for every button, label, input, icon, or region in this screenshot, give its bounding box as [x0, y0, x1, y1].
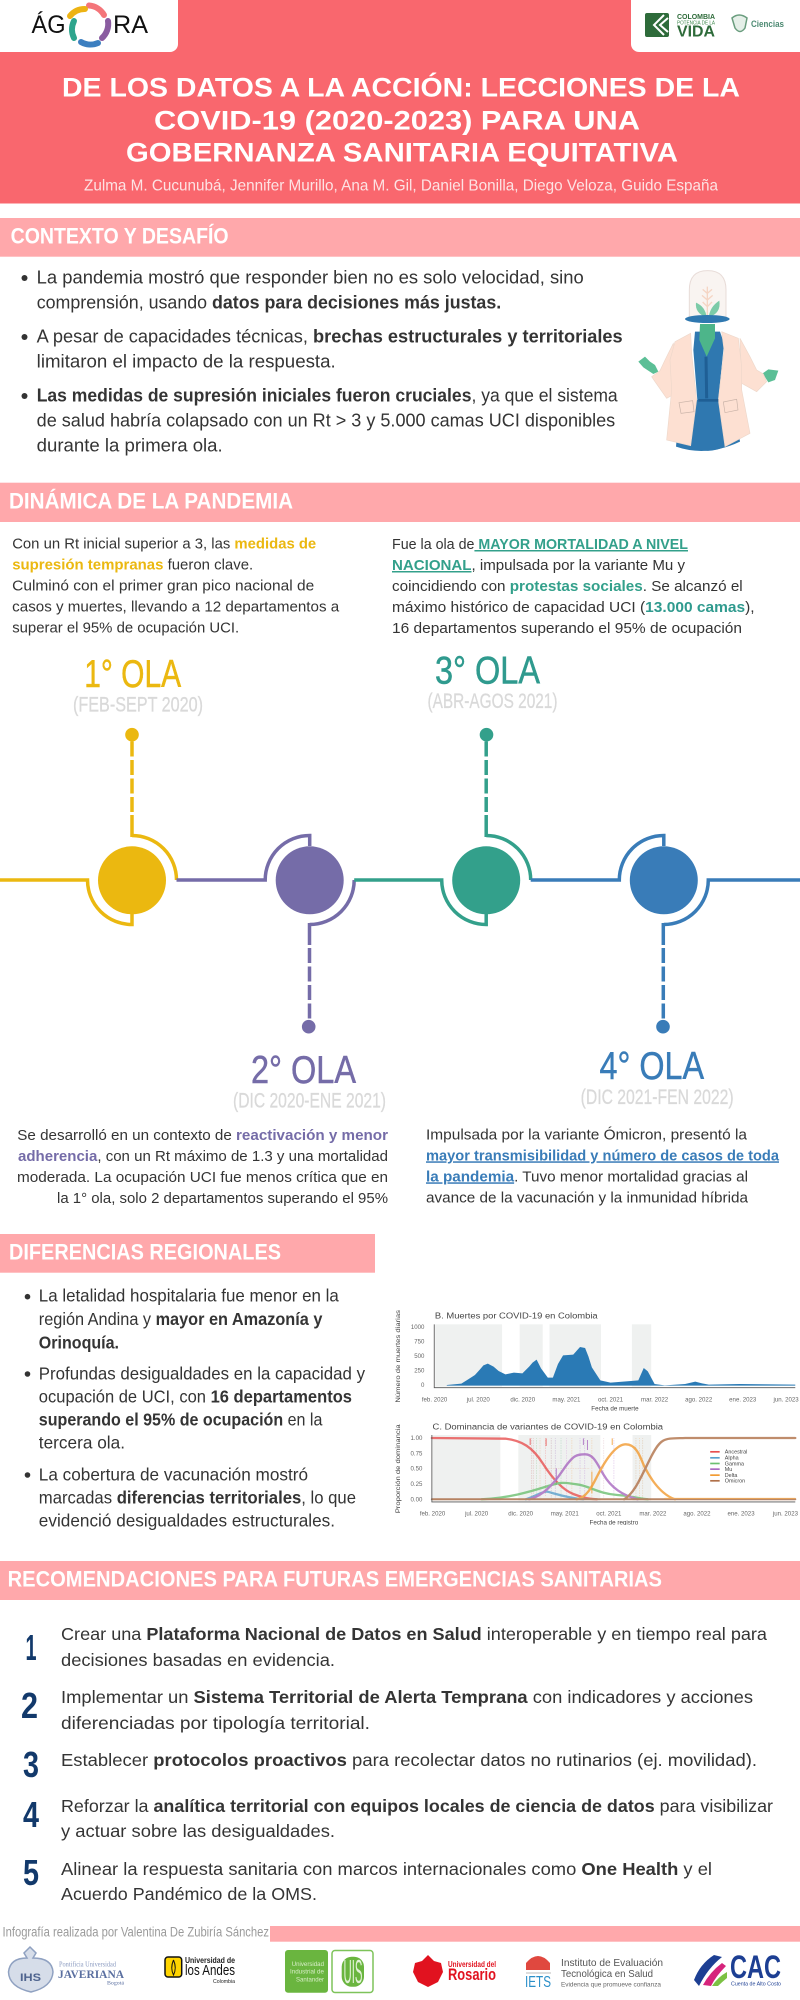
text block: primera ola: casos y muertes, llevando a 12 departamentos a — [12, 598, 340, 615]
logo: Universidad del Rosario — [413, 1955, 496, 1987]
heading: recomendaciones: RECOMENDACIONES PARA FUTURAS EMERGENCIAS SANITARIAS — [8, 1567, 662, 1592]
chart B: muertes diarias: 250 — [414, 1368, 425, 1374]
panel: recomendaciones — [0, 1561, 800, 1904]
chart C: dominancia de variantes: 0.75 — [410, 1451, 423, 1457]
panel: dinámica de la pandemia — [0, 483, 800, 1207]
chart C: dominancia de variantes: 1.00 — [410, 1436, 423, 1442]
chart C: dominancia de variantes: ene. 2023 — [727, 1512, 755, 1518]
logo: Universidad de los Andes: los Andes — [185, 1963, 235, 1979]
heading: contexto y desafío — [0, 218, 800, 257]
chart B: muertes diarias: Fecha de muerte — [591, 1406, 639, 1413]
text block: vacunación: evidenció desigualdades estructurales. — [39, 1510, 335, 1530]
text block: tercera ola: coincidiendo con protestas sociales. Se alcanzó el — [392, 578, 743, 595]
recommendation 2: 2 — [21, 1685, 38, 1726]
text block: tercera ola — [392, 536, 755, 637]
panel: contexto y desafío — [0, 218, 800, 455]
wave 2 node — [176, 836, 354, 1034]
logo: UIS: UIS — [344, 1953, 362, 1990]
text block: segunda ola: la 1° ola, solo 2 departamentos superando el 95% — [57, 1190, 388, 1207]
logo: Cuenta de Alto Costo: CAC — [730, 1949, 781, 1985]
logo: Javeriana: JAVERIANA — [58, 1967, 124, 1981]
label: 3° ola — [428, 649, 558, 713]
text block: desigualdades: tercera ola. — [39, 1433, 125, 1453]
chart B: muertes diarias: Número de muertes diarias — [395, 1309, 402, 1403]
text block: tercera ola: máximo histórico de capacidad UCI ( 13.000 camas), — [392, 599, 755, 616]
chart C: dominancia de variantes: C. Dominancia de variantes de COVID-19 en Colombia — [433, 1421, 663, 1431]
label: 1° ola: 1° OLA — [84, 653, 181, 696]
recommendation 1: Crear una Plataforma Nacional de Datos en Salud interoperable y en tiempo real para — [61, 1624, 767, 1644]
logo: Ágora: ÁG — [32, 10, 66, 39]
chart B: muertes diarias: 0 — [421, 1383, 425, 1389]
chart C: dominancia de variantes: oct. 2021 — [596, 1512, 622, 1518]
heading: dinámica de la pandemia — [0, 483, 800, 522]
logos: Colombia potencia de la vida, Ciencias — [631, 0, 800, 52]
text block: bullet 3 — [22, 385, 619, 455]
text block: primera ola: Culminó con el primer gran pico nacional de — [12, 577, 314, 594]
panel: diferencias regionales — [0, 1234, 799, 1530]
text block: segunda ola: moderada. La ocupación UCI fue menos crítica que en — [17, 1169, 388, 1186]
text block: cuarta ola: Impulsada por la variante Ómicron, presentó la — [426, 1126, 748, 1143]
logo: UIS — [285, 1950, 373, 1993]
label: 2° ola: 2° OLA — [251, 1049, 356, 1092]
chart C: dominancia de variantes: ago. 2022 — [683, 1512, 711, 1518]
text block: letalidad: La letalidad hospitalaria fue menor en la — [39, 1286, 339, 1306]
title: COVID-19 (2020-2023) PARA UNA — [154, 105, 640, 135]
text block: letalidad: Orinoquía. — [39, 1332, 119, 1352]
logo: IETS: IETS — [525, 1974, 551, 1991]
chart C: dominancia de variantes: Proporción de dominancia — [395, 1424, 402, 1513]
recommendation 5: Acuerdo Pandémico de la OMS. — [61, 1884, 317, 1904]
recommendation 4: 4 — [23, 1794, 39, 1835]
text block: bullet 2: limitaron el impacto de la respuesta. — [37, 351, 336, 371]
chart B: muertes diarias: 500 — [414, 1354, 425, 1360]
logo: UIS: Industrial de — [290, 1968, 324, 1976]
title: GOBERNANZA SANITARIA EQUITATIVA — [126, 138, 678, 168]
heading: diferencias regionales: DIFERENCIAS REGIONALES — [9, 1239, 281, 1264]
text block: vacunación: La cobertura de vacunación mostró — [39, 1464, 308, 1484]
chart C: dominancia de variantes: 0.50 — [410, 1467, 423, 1473]
text block: bullet 3: durante la primera ola. — [37, 435, 223, 455]
text block: cuarta ola: la pandemia. Tuvo menor mortalidad gracias al — [426, 1168, 748, 1185]
recommendation 3 — [23, 1744, 757, 1785]
chart legend: Ancestral — [725, 1450, 747, 1456]
text block: vacunación: marcadas diferencias territoriales, lo que — [39, 1487, 356, 1507]
text block: bullet 1: comprensión, usando datos para decisiones más justas. — [37, 292, 501, 312]
recommendation 1: decisiones basadas en evidencia. — [61, 1650, 335, 1670]
chart legend: Alpha — [725, 1456, 739, 1462]
text block: primera ola — [12, 535, 340, 636]
label: 3° ola: (ABR-AGOS 2021) — [428, 689, 558, 713]
logo: IETS: Instituto de Evaluación — [561, 1957, 663, 1969]
logos: Colombia potencia de la vida, Ciencias: Ciencias — [751, 19, 784, 30]
text block: desigualdades: ocupación de UCI, con 16 departamentos — [39, 1387, 352, 1407]
recommendation 4: Reforzar la analítica territorial con equipos locales de ciencia de datos para visibilizar — [61, 1796, 773, 1816]
text block: letalidad: región Andina y mayor en Amazonía y — [39, 1309, 323, 1329]
chart B: muertes diarias: feb. 2020 — [422, 1397, 448, 1403]
chart legend: Omicron — [725, 1479, 745, 1485]
recommendation 3: 3 — [23, 1744, 39, 1785]
label: 3° ola: 3° OLA — [435, 649, 540, 692]
chart legend — [710, 1450, 747, 1485]
footer credit — [2, 1925, 800, 1942]
logo: Javeriana — [8, 1947, 125, 1992]
recommendation 5 — [23, 1852, 712, 1904]
chart C: dominancia de variantes: jul. 2020 — [464, 1512, 489, 1518]
title — [62, 72, 740, 168]
text block: cuarta ola — [426, 1126, 780, 1206]
heading: contexto y desafío: CONTEXTO Y DESAFÍO — [11, 223, 229, 248]
heading: diferencias regionales — [0, 1234, 375, 1273]
logo: Universidad de los Andes — [165, 1956, 236, 1985]
footer credit: Infografía realizada por Valentina De Zubiría Sánchez — [2, 1925, 269, 1940]
recommendation 5: Alinear la respuesta sanitaria con marcos internacionales como One Health y el — [61, 1859, 712, 1879]
chart legend: Delta — [725, 1473, 737, 1479]
logo: Universidad del Rosario: Universidad del — [448, 1960, 496, 1969]
chart C: dominancia de variantes: jun. 2023 — [772, 1512, 799, 1518]
chart B: muertes diarias — [395, 1309, 799, 1413]
chart C: dominancia de variantes: may. 2021 — [551, 1512, 579, 1518]
recommendation 1 — [26, 1624, 767, 1670]
label: 1° ola — [73, 653, 203, 717]
text block: desigualdades — [25, 1363, 365, 1453]
recommendation 5: 5 — [23, 1852, 39, 1893]
logo: UIS: Universidad — [292, 1961, 324, 1968]
logo: Ágora: RA — [113, 11, 148, 39]
logo: Javeriana: Pontificia Universidad — [59, 1960, 116, 1969]
text block: tercera ola: Fue la ola de MAYOR MORTALIDAD A NIVEL — [392, 536, 688, 553]
header banner — [0, 0, 800, 204]
chart B: muertes diarias: may. 2021 — [552, 1397, 581, 1403]
chart B: muertes diarias: B. Muertes por COVID-19 en Colombia — [435, 1310, 598, 1320]
chart C: dominancia de variantes — [395, 1421, 799, 1527]
text block: cuarta ola: avance de la vacunación y la inmunidad híbrida — [426, 1189, 749, 1206]
chart B: muertes diarias: 750 — [414, 1340, 425, 1346]
recommendation 1: 1 — [26, 1627, 36, 1668]
text block: segunda ola — [17, 1127, 388, 1207]
chart C: dominancia de variantes: feb. 2020 — [420, 1512, 446, 1518]
chart legend: Gamma — [725, 1461, 744, 1467]
chart B: muertes diarias: mar. 2022 — [641, 1397, 669, 1403]
chart legend: Mu — [725, 1467, 732, 1473]
chart C: dominancia de variantes: dic. 2020 — [508, 1512, 534, 1518]
label: 2° ola — [233, 1049, 386, 1113]
chart B: muertes diarias: jun. 2023 — [773, 1397, 799, 1403]
logo: IETS: Evidencia que promueve confianza — [561, 1982, 661, 1988]
logo: IETS — [525, 1956, 663, 1991]
logo: Javeriana: Bogotá — [107, 1982, 125, 1986]
authors: Zulma M. Cucunubá, Jennifer Murillo, Ana M. Gil, Daniel Bonilla, Diego Veloza, Guido España — [84, 178, 718, 195]
text block: bullet 2: A pesar de capacidades técnicas, brechas estructurales y territoriales — [37, 326, 623, 346]
logo: Javeriana: IHS — [20, 1972, 41, 1984]
logo: Universidad de los Andes: Universidad de — [185, 1956, 235, 1965]
chart B: muertes diarias: dic. 2020 — [510, 1397, 536, 1403]
label: 4° ola: 4° OLA — [600, 1045, 704, 1088]
logos: Colombia potencia de la vida, Ciencias: COLOMBIA — [677, 12, 716, 21]
label: 4° ola: (DIC 2021-FEN 2022) — [581, 1085, 734, 1109]
text block: cuarta ola: mayor transmisibilidad y número de casos de toda — [426, 1147, 780, 1164]
text block: segunda ola: adherencia, con un Rt máximo de 1.3 y una mortalidad — [18, 1148, 388, 1165]
label: 1° ola: (FEB-SEPT 2020) — [73, 693, 203, 717]
wave 3 node — [354, 728, 531, 924]
text block: bullet 1: La pandemia mostró que responder bien no es solo velocidad, sino — [37, 267, 584, 287]
text block: primera ola: superar el 95% de ocupación UCI. — [12, 619, 239, 636]
text block: bullet 1 — [22, 267, 584, 312]
chart B: muertes diarias: jul. 2020 — [466, 1397, 490, 1403]
timeline of four waves — [0, 728, 800, 1034]
chart C: dominancia de variantes: 0.00 — [410, 1497, 423, 1503]
heading: dinámica de la pandemia: DINÁMICA DE LA PANDEMIA — [9, 488, 293, 513]
chart B: muertes diarias: ene. 2023 — [729, 1397, 757, 1403]
heading: recomendaciones — [0, 1561, 800, 1600]
text block: bullet 3: de salud habría colapsado con un Rt > 3 y 5.000 camas UCI disponibles — [37, 410, 615, 430]
recommendation 4 — [23, 1794, 773, 1841]
recommendation 2 — [21, 1685, 753, 1733]
label: 4° ola — [581, 1045, 734, 1109]
chart C: dominancia de variantes: 0.25 — [410, 1482, 423, 1488]
wave 4 node — [531, 836, 800, 1034]
chart B: muertes diarias: 1000 — [411, 1325, 425, 1331]
recommendation 2: Implementar un Sistema Territorial de Alerta Temprana con indicadores y acciones — [61, 1687, 753, 1707]
logo: UIS: Santander — [296, 1977, 325, 1984]
text block: bullet 2 — [22, 326, 623, 371]
text block: tercera ola: NACIONAL, impulsada por la variante Mu y — [392, 557, 685, 574]
text block: desigualdades: superando el 95% de ocupación en la — [39, 1410, 323, 1430]
text block: letalidad — [25, 1286, 339, 1352]
text block: primera ola: Con un Rt inicial superior a 3, las medidas de — [12, 535, 316, 552]
text block: tercera ola: 16 departamentos superando el 95% de ocupación — [392, 620, 742, 637]
logo: Cuenta de Alto Costo: Cuenta de Alto Costo — [731, 1982, 781, 1988]
logo: Universidad del Rosario: Rosario — [448, 1965, 496, 1984]
title: DE LOS DATOS A LA ACCIÓN: LECCIONES DE LA — [62, 72, 740, 103]
recommendation 4: y actuar sobre las desigualdades. — [61, 1821, 335, 1841]
logo: Ágora — [0, 0, 178, 52]
label: 2° ola: (DIC 2020-ENE 2021) — [233, 1089, 386, 1113]
text block: bullet 3: Las medidas de supresión iniciales fueron cruciales, ya que el sistema — [37, 385, 619, 405]
chart B: muertes diarias: oct. 2021 — [598, 1397, 624, 1403]
chart: muertes por COVID-19 y dominancia de variantes — [395, 1309, 799, 1527]
logos: Colombia potencia de la vida, Ciencias: POTENCIA DE LA — [677, 20, 716, 26]
logos: Colombia potencia de la vida, Ciencias: VIDA — [677, 24, 715, 40]
icon: figure with glass dome head — [638, 271, 778, 451]
chart C: dominancia de variantes: Fecha de registro — [590, 1520, 639, 1527]
text block: primera ola: supresión tempranas fueron clave. — [12, 556, 253, 573]
logo: Universidad de los Andes: Colombia — [213, 1979, 236, 1985]
text block: desigualdades: Profundas desigualdades en la capacidad y — [39, 1363, 365, 1383]
chart B: muertes diarias: ago. 2022 — [685, 1397, 713, 1403]
logo: IETS: Tecnológica en Salud — [561, 1968, 653, 1980]
chart C: dominancia de variantes: mar. 2022 — [639, 1512, 667, 1518]
logo: Cuenta de Alto Costo — [694, 1949, 781, 1988]
text block: vacunación — [25, 1464, 356, 1530]
wave 1 node — [0, 728, 176, 924]
recommendation 3: Establecer protocolos proactivos para recolectar datos no rutinarios (ej. movilidad). — [61, 1750, 757, 1770]
recommendation 2: diferenciadas por tipología territorial. — [61, 1713, 370, 1733]
text block: segunda ola: Se desarrolló en un contexto de reactivación y menor — [17, 1127, 388, 1144]
